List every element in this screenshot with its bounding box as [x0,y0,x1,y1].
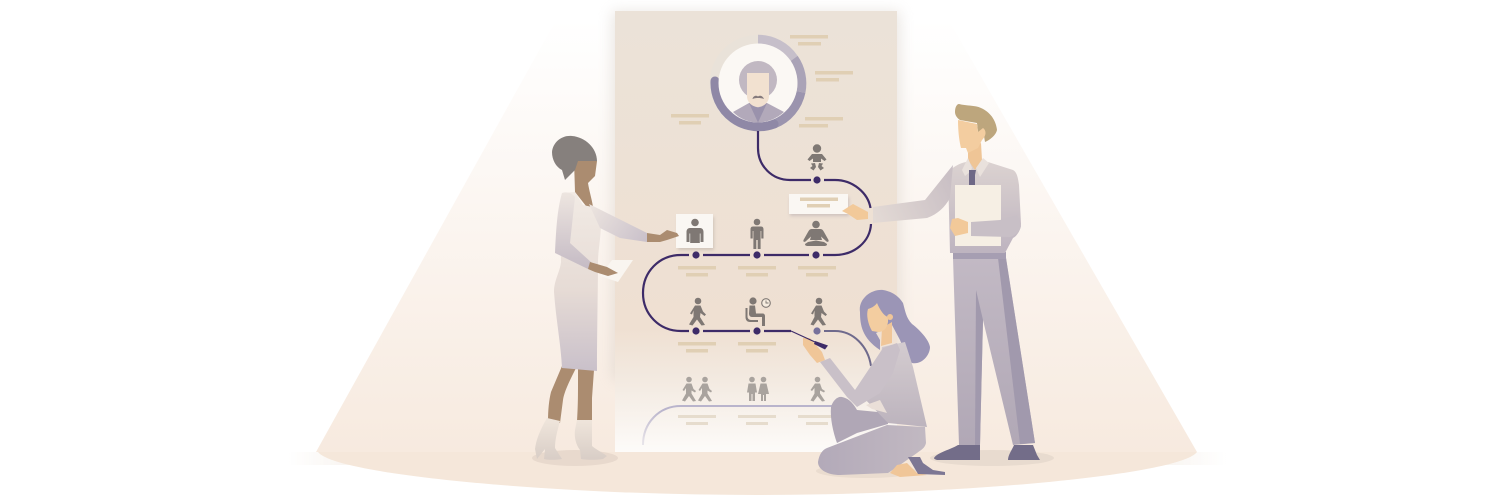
icon: meditating person [803,221,829,246]
neck [881,322,892,346]
right shoe [1008,445,1040,460]
marker tip [791,331,815,342]
raised knee [831,397,888,443]
avatar hair [739,61,777,99]
card [676,214,713,248]
icon card: torso [676,214,714,250]
ground shadow [532,450,618,466]
timeline path dark [643,131,871,331]
person: kneeling woman with marker [791,290,945,478]
icon: walking person faded [810,377,825,402]
pointing hand [842,204,868,220]
torso figure [686,219,704,243]
icon: waiting seated person with clock [746,297,770,326]
icon: standing person [750,219,764,249]
icon: couple walking [682,377,712,402]
upcoming dot [813,327,821,335]
ring segment 4 [715,81,774,127]
donut labels [671,35,853,128]
faint ring track [714,39,802,127]
card shadow [678,217,714,250]
timeline path lower row [643,406,835,445]
light wedge [866,400,887,413]
person: man with notebook [842,104,1054,466]
icon: walking person 2 [810,298,827,326]
drawing hand [803,338,825,363]
left boot [535,418,562,460]
drawing arm [820,343,900,407]
lower hand [588,262,618,276]
panel shadow [612,11,900,380]
trouser crease shade [998,258,1035,444]
left shoe [934,445,980,460]
marker body [814,341,828,350]
note shadow [790,197,849,216]
collar and tie [962,158,989,185]
ground shadow [930,450,1054,466]
profile donut [714,39,802,127]
forearm [971,215,1021,237]
timeline dots [692,176,821,335]
face [867,303,888,332]
timeline path faded upcoming [824,331,871,366]
left arm sleeve [555,192,592,269]
avatar bust [733,103,784,122]
note card [789,194,848,214]
hair [955,104,997,142]
holding hand [950,218,968,236]
outstretched arm [873,165,953,223]
avatar disc [718,44,798,122]
avatar face [747,73,769,107]
panel: journey board [612,11,900,452]
lower leg [818,425,926,475]
front leg [577,368,594,422]
back leg [548,366,576,423]
collar left [962,158,972,176]
right arm sleeve [589,204,647,242]
note lines [800,198,838,201]
right hand [647,230,679,242]
collar right [976,158,989,177]
trousers [953,258,1035,445]
ground shadow [816,464,916,478]
hair back [860,290,930,363]
panel background [615,11,897,452]
face [958,120,986,153]
inner leg shade [975,290,983,445]
avatar moustache [752,96,764,99]
icon: baby [808,144,826,170]
shirt torso [948,162,1021,253]
belt [953,252,1006,259]
icon: man and woman [747,377,769,401]
spotlight beam [316,0,1197,452]
neck and chest skin [574,160,597,207]
sock foot [908,457,945,475]
floor shadow band [288,452,1226,465]
paper in hand [600,260,633,282]
icon: walking person 1 [689,298,706,326]
timeline labels [678,266,836,352]
dress [554,192,601,371]
hair [552,136,597,180]
avatar tie panel [749,103,767,122]
note card with lines [789,194,849,216]
lower timeline labels [678,415,836,425]
notebook [955,185,1001,246]
floor ellipse [318,452,1197,495]
bare foot [890,463,927,477]
ear [887,314,893,320]
tie [969,170,976,185]
person: woman in white dress [532,136,679,466]
ring segment 1 [758,39,794,58]
neck [968,143,982,170]
sweater [862,342,927,427]
right boot [575,420,607,460]
ring segment 3 [774,92,801,124]
ring segment 2 [794,58,802,92]
